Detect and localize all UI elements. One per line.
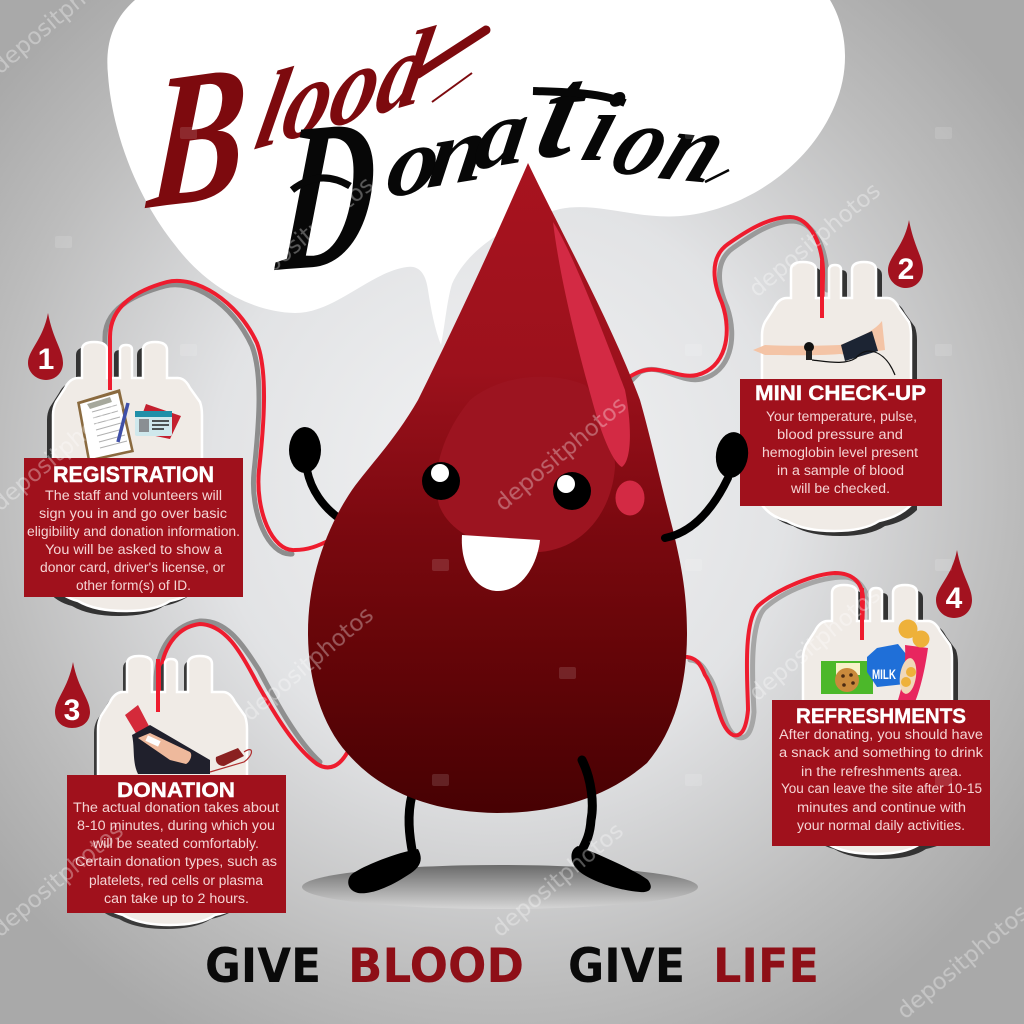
title word: Donation: o [362,103,467,219]
mascot highlight [553,222,630,467]
text: registration details: The staff and volunteers will [45,488,222,503]
icon: clipboard and pen [77,389,134,462]
tagline: give blood give life: GIVE [568,939,685,994]
mascot mouth [462,535,540,591]
mascot left arm [289,427,340,519]
mascot face patch [436,377,615,552]
step 3: donation [55,656,286,929]
title word: Donation: i [571,72,634,181]
title word: Donation [269,38,763,317]
icon: snack bag [898,620,930,702]
heading: mini check-up: MINI CHECK-UP [755,382,926,405]
icon: identity cards [135,404,181,439]
watermark text: depositphotos [237,172,379,297]
watermark text: depositphotos [744,178,886,303]
heading: donation: DONATION [117,779,235,802]
drop badge 1 [28,313,63,380]
mascot cheek [616,480,644,516]
text: donation details: Certain donation types, such as [75,854,277,869]
panel: donation [67,775,286,913]
mascot right leg [571,760,651,892]
text: registration details: eligibility and donation information. [27,524,240,539]
bag 3 [94,656,247,929]
speech bubble [107,0,845,345]
text: mini check-up details: in a sample of blood [777,463,904,478]
text: registration details: donor card, driver's license, or [40,560,226,575]
text: registration details: other form(s) of ID. [76,578,191,593]
mascot left leg [348,795,421,893]
icon: cookie pack [821,661,873,694]
mascot right arm [665,430,751,538]
mascot drop body [308,163,687,813]
watermark text: depositphotos [490,392,632,517]
text: refreshments details: your normal daily activities. [797,818,965,833]
title word: Donation: o [596,85,691,198]
title word: Donation: n [645,91,746,204]
wire: step 1 to mascot [105,281,330,554]
watermark text: depositphotos [237,602,379,727]
watermark text: depositphotos [487,818,629,943]
drop badge 2 [888,220,923,288]
step 1: registration [24,313,243,616]
bag 1 [47,342,202,616]
watermark icons [55,21,952,786]
mascot shadow [302,865,698,909]
text: registration details [27,488,240,593]
panel: registration [24,458,243,597]
drop badge 4 [936,550,972,618]
heading: refreshments: REFRESHMENTS [796,705,966,728]
text: mini check-up details [762,409,918,496]
heading: registration: REGISTRATION [53,462,214,487]
title word: Donation: t [512,38,613,187]
text: mini check-up details: blood pressure and [777,427,903,442]
text: mini check-up details: hemoglobin level present [762,445,918,460]
text: donation details: platelets, red cells or plasma [89,873,263,888]
drop badge 3: 3 [64,694,80,727]
step 4: refreshments [772,550,990,859]
panel: refreshments [772,700,990,846]
drop badge 1: 1 [38,343,54,376]
title word: Donation: a [450,75,555,191]
drop badge 4: 4 [946,582,963,615]
title word: Blood: lood [247,3,442,174]
text: refreshments details: minutes and continue with [797,800,966,815]
text: donation details [73,800,279,906]
text: donation details: can take up to 2 hours. [104,891,249,906]
tagline: give blood give life: BLOOD [348,939,524,994]
drop badge 2: 2 [898,253,914,286]
mascot: blood drop character [289,163,751,893]
text: refreshments details: a snack and something to drink [779,745,983,760]
title word: Donation: n [403,92,514,209]
text: refreshments details: You can leave the site after 10-15 [781,781,982,796]
text: donation details: 8-10 minutes, during which you [77,818,275,833]
wire: step 4 to mascot [687,573,870,738]
wire: step 3 to mascot [155,621,347,767]
text: refreshments details: After donating, you should have [779,727,983,742]
text: mini check-up details: Your temperature, pulse, [766,409,917,424]
tagline: give blood give life: LIFE [713,939,819,994]
tagline: give blood give life: GIVE [205,939,321,994]
title word: Blood: B [141,23,253,251]
bag 4 [803,585,958,859]
title word: Blood [141,3,486,251]
icon: arm with blood pressure cuff [753,321,895,375]
icon: donor arm on rest with blood bag [125,705,252,774]
text: donation details: will be seated comfortably. [92,836,259,851]
text: refreshments details [779,727,983,833]
icon: milk carton [867,644,906,687]
step 2: mini check-up [740,220,942,536]
drop badge 3 [55,662,90,728]
mascot right eye [553,472,591,510]
text: registration details: sign you in and go over basic [39,506,227,521]
tagline: give blood give life [205,939,819,994]
text: mini check-up details: will be checked. [790,481,890,496]
text: registration details: You will be asked to show a [45,542,223,557]
text: refreshments details: in the refreshments area. [801,764,962,779]
text: donation details: The actual donation takes about [73,800,279,815]
watermark text: depositphotos [744,582,886,707]
panel: mini check-up [740,379,942,506]
title word: Donation: D [269,74,385,317]
wire: step 2 to mascot [628,217,827,380]
bag 2 [762,260,917,536]
mascot left eye [422,462,460,500]
title: Blood Donation [141,3,763,317]
icon: milk carton: MILK [872,666,896,682]
